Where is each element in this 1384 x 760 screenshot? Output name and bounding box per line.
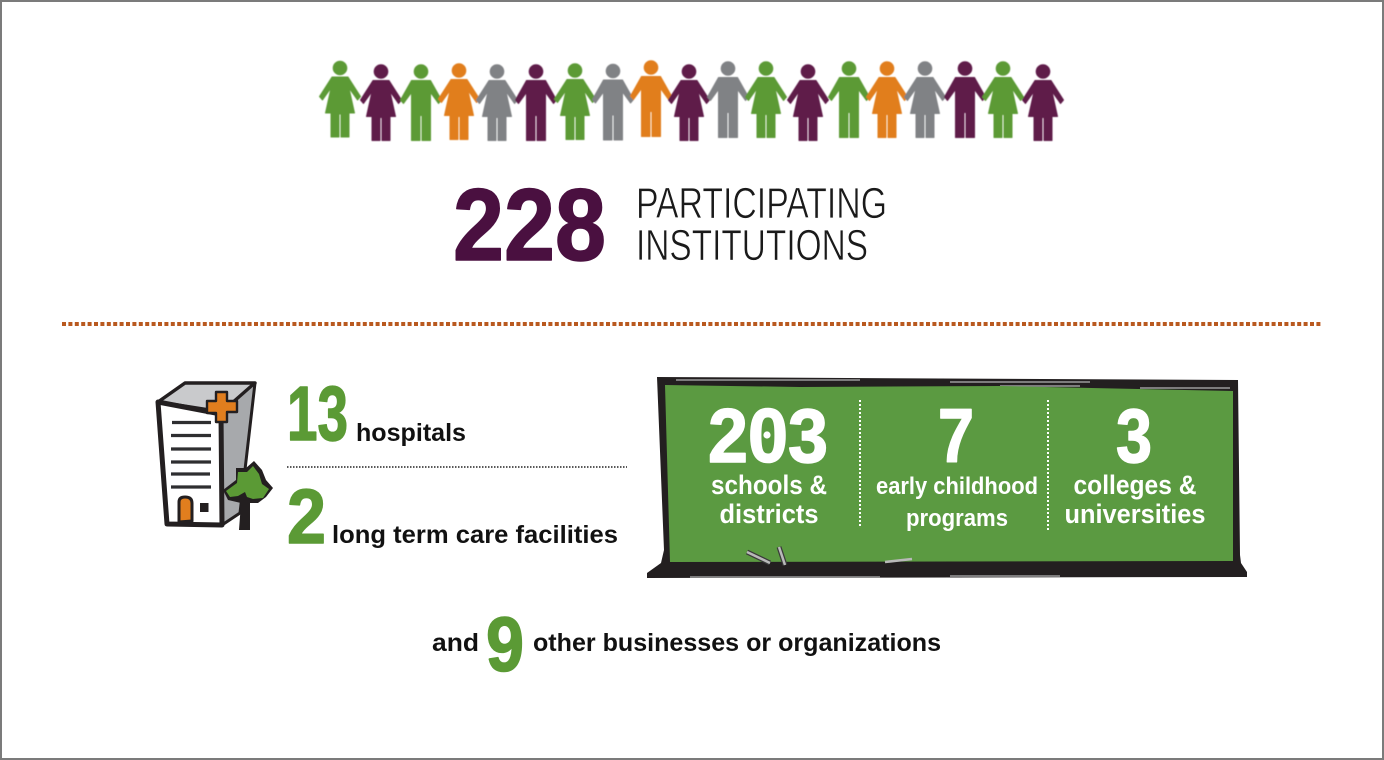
label: participating institutions: INSTITUTIONS [636, 221, 868, 270]
label: participating institutions: PARTICIPATING [636, 179, 887, 228]
column: 203 schools and districts: schools & [711, 470, 827, 500]
building front [158, 402, 222, 525]
column: 3 colleges and universities: 3 [1116, 394, 1152, 479]
tree [223, 461, 273, 530]
stat: 13 hospitals [287, 371, 466, 457]
stat: 13 hospitals: 13 [287, 371, 348, 457]
column: 7 early childhood programs: programs [906, 505, 1008, 532]
column: 7 early childhood programs: 7 [938, 394, 974, 479]
board green surface [665, 385, 1233, 562]
row of people holding hands [320, 61, 1064, 141]
stat: and 9 other businesses or organizations: 9 [486, 602, 524, 688]
stat: 2 long term care facilities: long term care facilities [332, 521, 618, 549]
column: 7 early childhood programs: early childhood [876, 473, 1038, 500]
building top [158, 383, 255, 412]
board highlights [676, 380, 1230, 577]
label: participating institutions [636, 179, 887, 270]
column: 3 colleges and universities: colleges & [1074, 470, 1196, 500]
chalk marks [747, 547, 785, 565]
column: 3 colleges and universities [1064, 394, 1206, 529]
icon: hospital building with tree [158, 383, 273, 530]
chalkboard panel [647, 377, 1247, 578]
door [179, 497, 192, 522]
column: 7 early childhood programs [876, 394, 1038, 532]
building side [222, 383, 255, 525]
column: 203 schools and districts [708, 394, 828, 529]
column: 203 schools and districts: districts [720, 499, 818, 529]
window lines [171, 422, 211, 487]
small window [200, 503, 208, 512]
column: 3 colleges and universities: universities [1064, 499, 1206, 529]
stat: and 9 other businesses or organizations: and [432, 629, 479, 657]
board frame [647, 377, 1247, 578]
stat: 13 hospitals: hospitals [356, 419, 466, 447]
number 228: 228 [453, 168, 606, 282]
stat: 2 long term care facilities: 2 [287, 474, 326, 560]
stat: and 9 other businesses or organizations [432, 602, 941, 688]
column: 203 schools and districts: 203 [708, 394, 828, 479]
stat: 2 long term care facilities [287, 474, 618, 560]
stat: and 9 other businesses or organizations: other businesses or organizations [533, 629, 941, 657]
headline: 228 participating institutions [453, 168, 887, 282]
orange cross [207, 392, 237, 422]
